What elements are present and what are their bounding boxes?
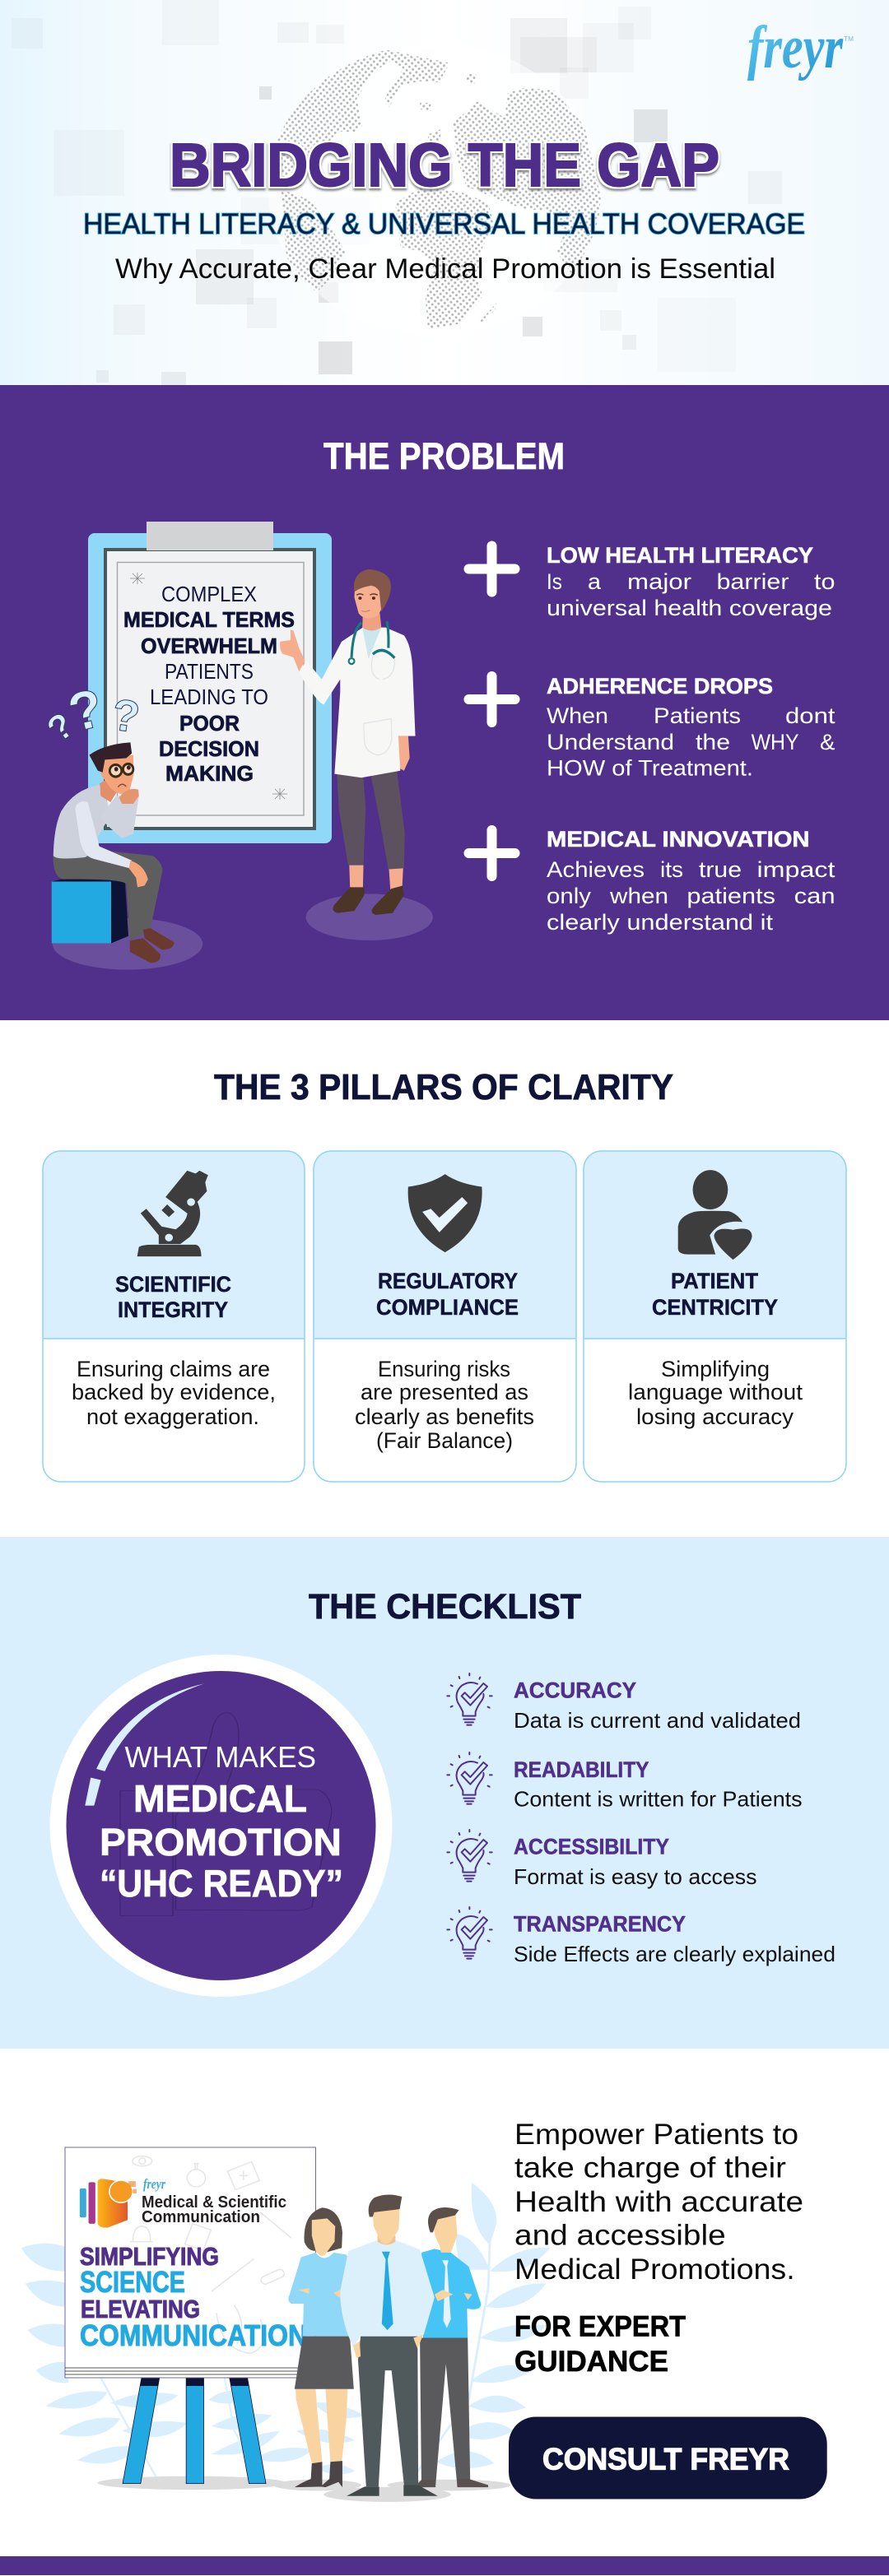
checklist item: readability: READABILITY (514, 1757, 649, 1782)
item: adherence drops (464, 671, 835, 780)
presentation board: SIMPLIFYING (80, 2242, 219, 2271)
checklist item: accuracy: Data is current and validated (514, 1708, 801, 1733)
icon: plus (464, 541, 520, 597)
clipboard (88, 522, 332, 843)
card: scientific integrity: not exaggeration. (86, 1404, 259, 1429)
presentation board: freyr (143, 2176, 165, 2192)
presentation board: ELEVATING (81, 2295, 200, 2323)
subtitle: HEALTH LITERACY & UNIVERSAL HEALTH COVERAGE (83, 208, 805, 240)
item: adherence drops: Understand (547, 730, 674, 754)
item: low health literacy (464, 541, 835, 620)
card: patient centricity: losing accuracy (636, 1404, 794, 1429)
icon: shield (408, 1174, 482, 1252)
heading: the problem: THE PROBLEM (323, 435, 565, 477)
globe (268, 44, 602, 335)
item: medical innovation: patients (687, 884, 775, 908)
item: adherence drops: When (547, 703, 608, 728)
header panel (0, 0, 889, 385)
item: adherence drops: & (820, 730, 835, 754)
body text: empower patients: Empower Patients to (514, 2119, 798, 2151)
icon: plus (464, 671, 520, 727)
clipboard text: OVERWHELM (141, 634, 277, 658)
icon: thumbs up outline and arc (85, 1683, 332, 1916)
presentation board: Medical & Scientific (142, 2193, 286, 2212)
item: medical innovation: when (609, 884, 668, 908)
card: scientific integrity: backed by evidence, (72, 1380, 276, 1404)
icon: question marks: ? (40, 705, 81, 750)
clipboard text: LEADING TO (150, 685, 268, 709)
badge: what makes medical promotion uhc ready: “UHC READY” (100, 1862, 343, 1905)
icon: bulb check (447, 1673, 492, 1725)
item: low health literacy: to (814, 569, 835, 594)
checklist item: readability: Content is written for Patients (514, 1787, 802, 1812)
text: for expert guidance: FOR EXPERT (514, 2311, 686, 2343)
card: regulatory compliance: COMPLIANCE (376, 1295, 519, 1320)
clipboard text: MAKING (165, 761, 254, 786)
item: medical innovation: can (794, 884, 835, 908)
item: adherence drops: Patients (654, 703, 741, 728)
card: patient centricity: CENTRICITY (652, 1295, 778, 1320)
item: medical innovation: impact (757, 857, 835, 882)
team of three people (273, 2194, 511, 2502)
card: scientific integrity: SCIENTIFIC (115, 1272, 231, 1297)
item: medical innovation: MEDICAL INNOVATION (547, 827, 810, 852)
background leaves (21, 2183, 550, 2477)
icon: question marks: ? (109, 689, 142, 742)
background squares (12, 0, 782, 385)
item: low health literacy: LOW HEALTH LITERACY (547, 543, 813, 568)
person: right man (388, 2207, 511, 2490)
checklist item: accessibility: Format is easy to access (514, 1864, 757, 1889)
badge: what makes medical promotion uhc ready: WHAT MAKES (125, 1740, 316, 1774)
clipboard text (123, 582, 295, 786)
card: patient centricity: language without (628, 1380, 803, 1404)
item: low health literacy: Is (547, 569, 562, 594)
text: for expert guidance (514, 2311, 686, 2378)
button: consult freyr (509, 2417, 827, 2499)
text: for expert guidance: GUIDANCE (514, 2346, 668, 2378)
card: scientific integrity: Ensuring claims are (77, 1357, 270, 1381)
checklist item: transparency (447, 1907, 835, 1966)
item: medical innovation: only (547, 884, 592, 908)
item: medical innovation: clearly understand it (547, 910, 774, 935)
doctor illustration (280, 569, 433, 940)
badge: what makes medical promotion uhc ready: PROMOTION (100, 1821, 342, 1864)
item: low health literacy: a (588, 569, 601, 594)
clipboard text: PATIENTS (165, 659, 254, 684)
heading: pillars: THE 3 PILLARS OF CLARITY (214, 1067, 673, 1107)
card: regulatory compliance: are presented as (361, 1380, 528, 1404)
presentation board: SCIENCE (80, 2265, 185, 2299)
tagline: Why Accurate, Clear Medical Promotion is Essential (115, 253, 775, 285)
item: low health literacy: major (627, 569, 691, 594)
title: BRIDGING THE GAP (170, 131, 719, 199)
card: scientific integrity (43, 1151, 305, 1482)
item: medical innovation: its (660, 857, 683, 882)
icon: bulb check (447, 1752, 492, 1804)
card: regulatory compliance: Ensuring risks (378, 1357, 510, 1381)
item: adherence drops: the (696, 730, 730, 754)
card: patient centricity: PATIENT (671, 1269, 758, 1293)
button: consult freyr: CONSULT FREYR (542, 2443, 789, 2476)
presentation board: COMMUNICATION (80, 2318, 307, 2352)
clipboard text: MEDICAL TERMS (123, 607, 295, 632)
person: woman (273, 2207, 361, 2490)
clipboard text: COMPLEX (161, 582, 257, 606)
checklist item: accessibility (447, 1830, 757, 1889)
checklist item: transparency: TRANSPARENCY (514, 1912, 686, 1937)
presentation board (65, 2147, 316, 2378)
card: regulatory compliance: clearly as benefits (355, 1404, 534, 1429)
item: medical innovation: true (699, 857, 742, 882)
icon: microscope (137, 1171, 208, 1256)
panel: call to action (0, 2049, 889, 2556)
body text: empower patients: take charge of their (514, 2152, 786, 2184)
body text: empower patients: Medical Promotions. (514, 2253, 795, 2286)
easel legs (98, 2378, 286, 2490)
heading: checklist: THE CHECKLIST (309, 1587, 581, 1627)
icon: plus (464, 825, 520, 881)
footer bar (0, 2556, 889, 2575)
item: adherence drops: HOW of Treatment. (547, 755, 753, 780)
item: adherence drops: WHY (752, 730, 799, 754)
checklist item: accuracy: ACCURACY (514, 1678, 636, 1703)
logo: freyr: freyr (747, 14, 844, 81)
badge: what makes medical promotion uhc ready (49, 1655, 392, 1997)
item: low health literacy: barrier (716, 569, 789, 594)
checklist item: accessibility: ACCESSIBILITY (514, 1835, 669, 1859)
logo: freyr: TM (844, 35, 854, 43)
item: medical innovation (464, 825, 835, 935)
body text: empower patients: and accessible (514, 2220, 726, 2251)
confused patient illustration (52, 742, 202, 970)
panel: the problem (0, 385, 889, 1020)
card: patient centricity: Simplifying (661, 1357, 770, 1381)
checklist item: transparency: Side Effects are clearly explained (514, 1942, 835, 1966)
icon: patient with heart (678, 1170, 753, 1260)
clipboard text: DECISION (159, 736, 259, 761)
clipboard text: POOR (179, 711, 240, 736)
checklist item: accuracy (447, 1673, 801, 1733)
logo: medical and scientific communication (80, 2179, 137, 2228)
card: regulatory compliance: REGULATORY (378, 1269, 518, 1293)
card: scientific integrity: INTEGRITY (118, 1297, 228, 1322)
checklist item: readability (447, 1752, 802, 1812)
card: patient centricity (584, 1151, 846, 1482)
item: adherence drops: dont (785, 703, 835, 728)
card: regulatory compliance: (Fair Balance) (376, 1428, 513, 1453)
panel: the checklist (0, 1537, 889, 2049)
panel: the 3 pillars of clarity (0, 1020, 889, 1537)
card: regulatory compliance (314, 1151, 576, 1482)
icon: bulb check (447, 1907, 492, 1959)
badge: what makes medical promotion uhc ready: MEDICAL (133, 1777, 307, 1820)
item: low health literacy: universal health coverage (547, 596, 832, 620)
body text: empower patients (514, 2119, 803, 2286)
item: adherence drops: ADHERENCE DROPS (547, 674, 773, 699)
person: centre man (323, 2194, 451, 2502)
icon: question marks (40, 676, 142, 750)
presentation board: Communication (142, 2208, 260, 2226)
faint medical icons (130, 2156, 291, 2353)
icon: question marks: ? (62, 676, 109, 744)
icon: bulb check (447, 1830, 492, 1882)
item: medical innovation: Achieves (547, 857, 645, 882)
body text: empower patients: Health with accurate (514, 2186, 803, 2218)
